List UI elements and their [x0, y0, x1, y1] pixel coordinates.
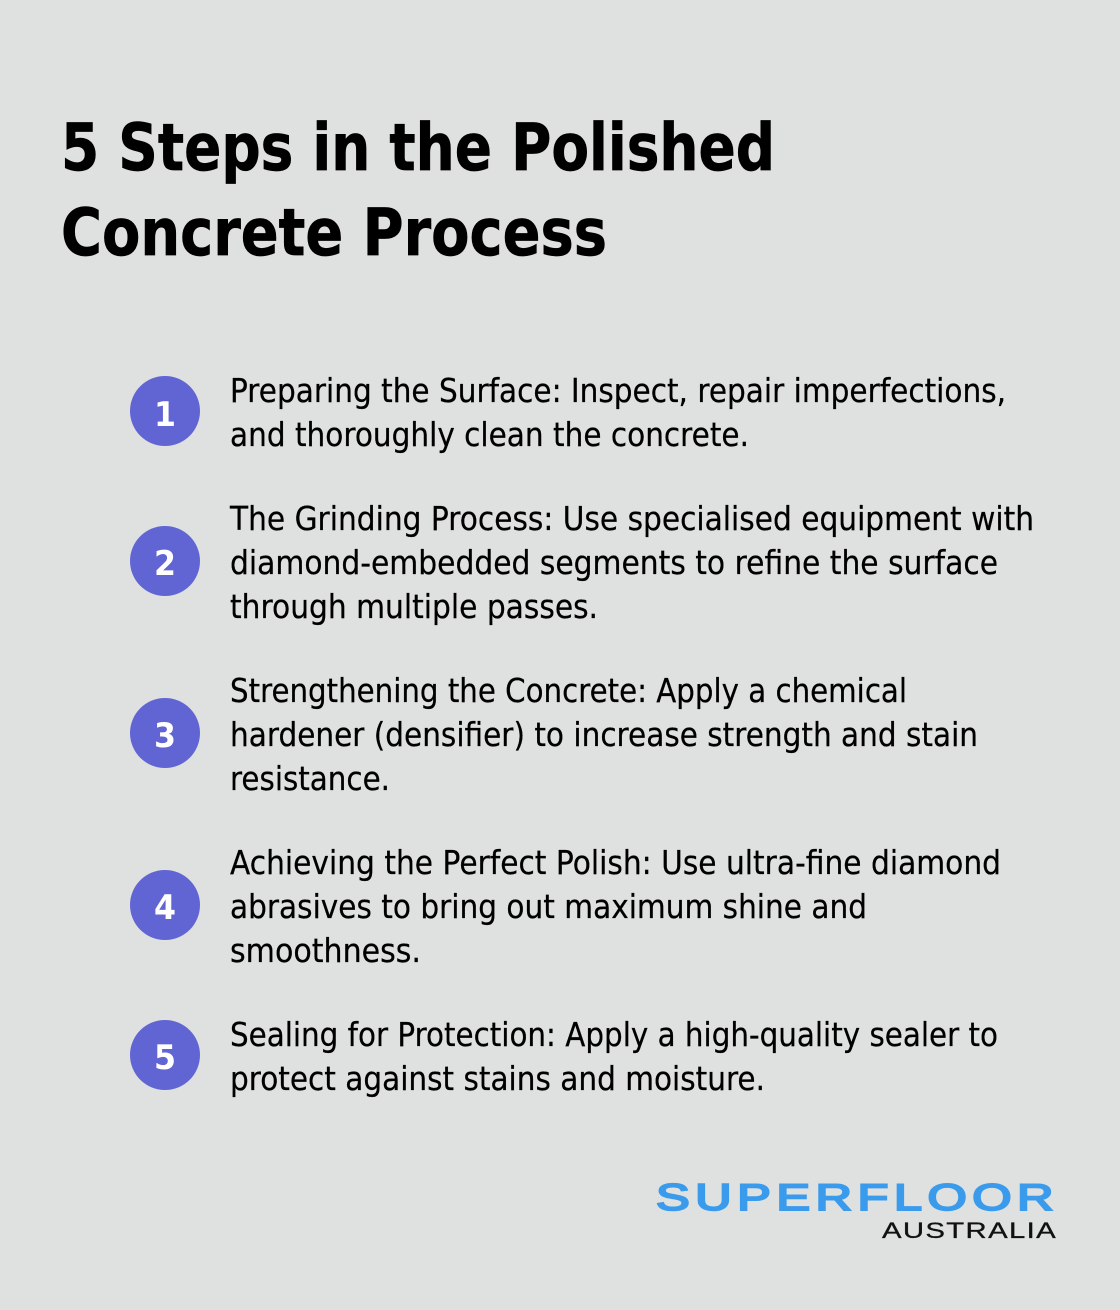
logo: Superfloor Australia: AUSTRALIA [882, 1218, 1057, 1243]
step 1 [130, 372, 1006, 454]
title: Concrete Process [61, 196, 607, 271]
step 4: abrasives to bring out maximum shine and [230, 888, 867, 926]
title: 5 Steps in the Polished [61, 111, 775, 186]
step 2: through multiple passes. [230, 588, 598, 626]
step 5: Sealing for Protection: Apply a high-quality sealer to [230, 1016, 998, 1054]
step 1: 1 [154, 395, 176, 435]
step 2: diamond-embedded segments to refine the surface [230, 544, 998, 582]
step 4: Achieving the Perfect Polish: Use ultra-fine diamond [230, 844, 1001, 882]
step 4: smoothness. [230, 932, 421, 970]
step 5: 5 [154, 1038, 176, 1078]
step 5: protect against stains and moisture. [230, 1060, 765, 1098]
title [61, 111, 775, 271]
steps list [130, 372, 1034, 1098]
step 2: The Grinding Process: Use specialised equipment with [229, 500, 1034, 538]
step 4: 4 [154, 888, 176, 928]
step 5 [130, 1016, 998, 1098]
step 3: 3 [154, 716, 176, 756]
logo: Superfloor Australia: SUPERFLOOR [656, 1177, 1059, 1218]
step 4 [130, 844, 1001, 970]
step 2: 2 [154, 544, 176, 584]
step 3: resistance. [230, 760, 390, 798]
step 3: Strengthening the Concrete: Apply a chemical [230, 672, 907, 710]
step 3: hardener (densifier) to increase strength and stain [230, 716, 978, 754]
step 3 [130, 672, 978, 798]
logo: Superfloor Australia [656, 1177, 1059, 1243]
step 1: and thoroughly clean the concrete. [230, 416, 749, 454]
step 1: Preparing the Surface: Inspect, repair imperfections, [230, 372, 1006, 410]
step 2 [130, 500, 1034, 626]
